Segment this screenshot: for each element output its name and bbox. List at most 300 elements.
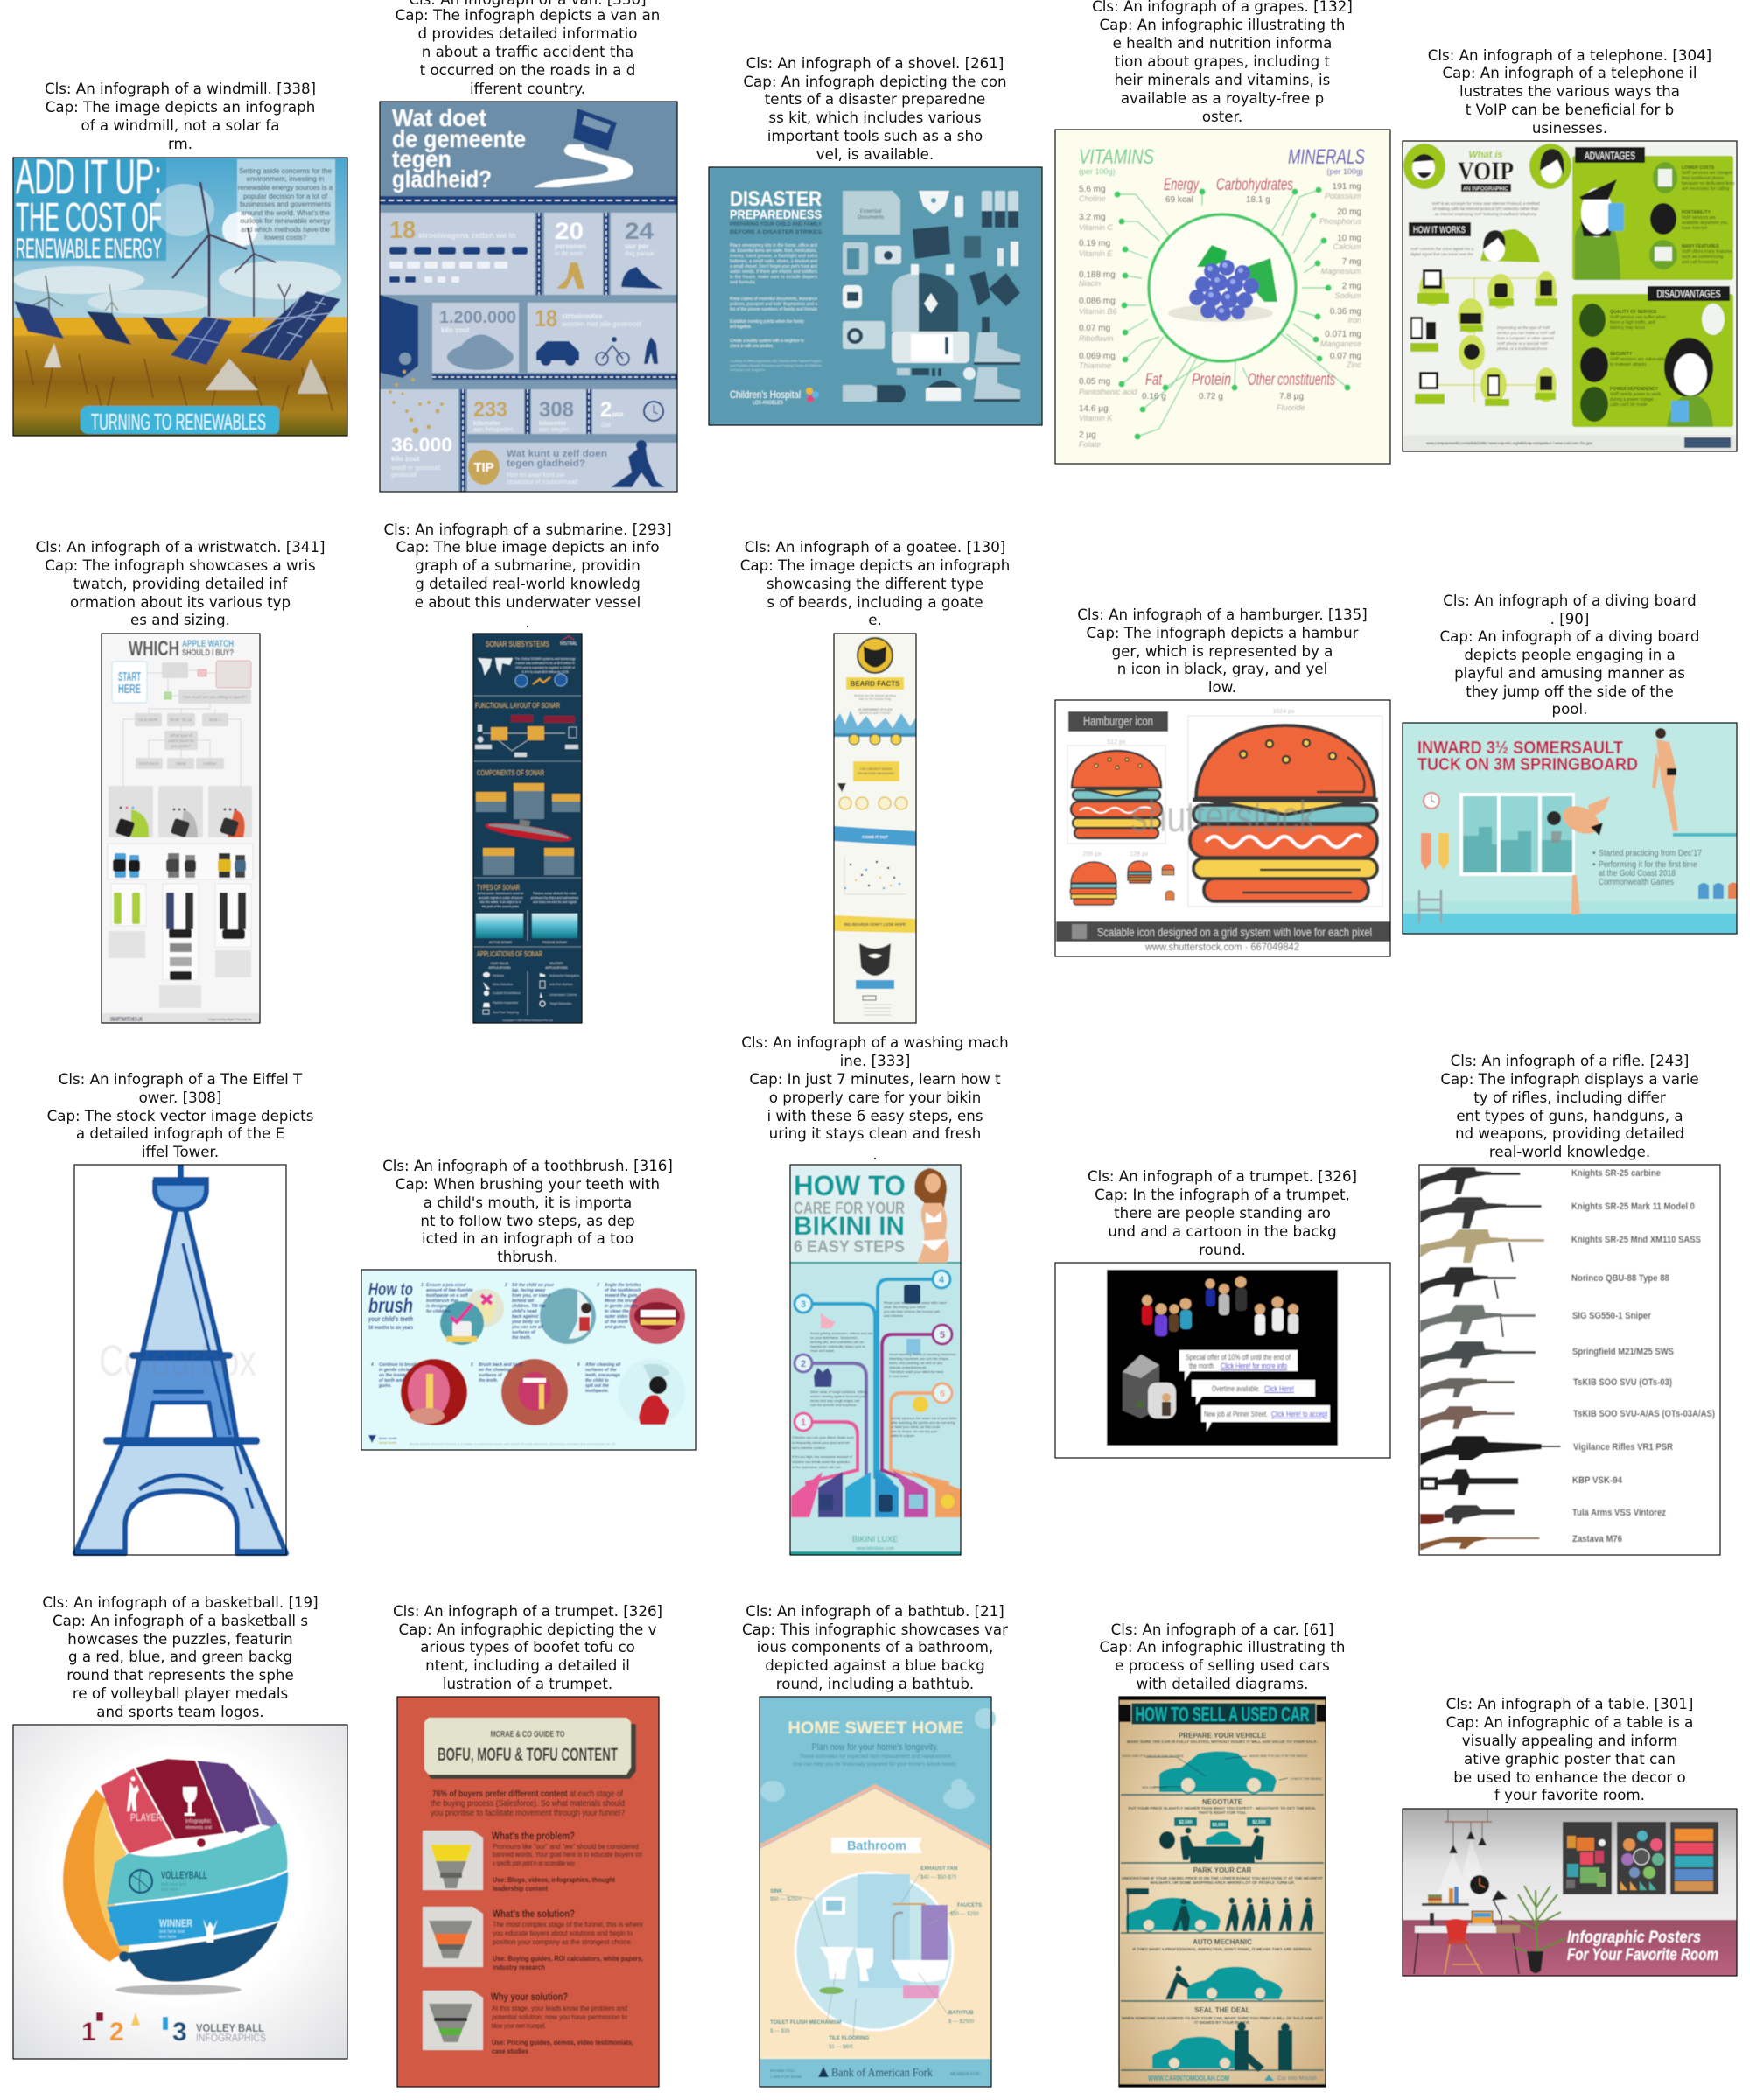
caption: diving board: playful and amusing manner as [1454,665,1685,682]
caption: trumpet (people): there are people standing aro [1114,1205,1331,1222]
image: springboard dive [1403,723,1737,934]
image: gritting poster: 2 [600,398,612,422]
caption: bathtub: ious components of a bathroom, [757,1639,993,1656]
image: bikini care poster: on your swimwear. Sunscreen, [810,1335,858,1340]
image: grape nutrition chart: Iron [1348,316,1362,325]
image: people and speech bubbles: the month. [1189,1362,1215,1371]
caption: grapes: tion about grapes, including t [1115,53,1330,70]
image: gritting poster: tegen [392,145,452,172]
image: disaster preparedness poster: Essential [860,209,881,214]
image: VoIP poster: HOW IT WORKS [1413,225,1466,235]
image: grape nutrition chart: 2 mg [1342,282,1362,291]
panel: windmill [13,80,347,436]
image: grape nutrition chart: Fat [1145,371,1162,389]
image: bikini care poster: Avoid washing bikinis in washing machines. [889,1352,956,1356]
image: how to sell a used car poster: WWW.CARINTOMOOLAH.COM [1148,2075,1229,2082]
caption: toothbrush: a child's mouth, it is importa [424,1194,632,1211]
panel: rifle [1419,1053,1720,1555]
image: bikini care poster: 6 [940,1389,945,1399]
image: sonar poster: Active sonar: transducers send an [478,892,524,895]
image: VoIP poster: VoIP is an acronym for Voice over Internet Protocol, a method [1432,201,1540,206]
image: BOFU MOFU TOFU poster: case studies [492,2047,528,2055]
image: volleyball puzzle: INFOGRAPHICS [196,2032,266,2044]
image: VoIP poster: latency may occur [1610,326,1646,331]
caption: van: Cap: The infograph depicts a van an [396,7,660,24]
image: grape nutrition chart: 0.16 g [1142,392,1166,402]
image: grape nutrition chart: Vitamin E [1079,249,1113,258]
image: VoIP poster: SECURITY [1610,352,1633,357]
image: bikini care poster: wear. By rinsing your bikini [884,1305,925,1309]
image: home sweet home poster: $ — $2500 [948,2020,975,2025]
image: how to brush poster: 18 months to six years [368,1325,413,1331]
panel: bathtub [742,1603,1008,2087]
image: VoIP poster: have Internet [1682,226,1708,231]
image: hamburger icon sizes: Hamburger icon [1083,714,1153,729]
image: sonar poster: COMPONENTS OF SONAR [477,768,544,777]
image: disaster preparedness poster: and Pediatric Disaster Resource and Training Center at Children's [730,363,822,368]
caption: grapes: oster. [1202,108,1242,125]
image: sonar poster: Sea Floor Mapping [493,1011,519,1014]
caption: submarine: . [525,614,530,631]
image: grape nutrition chart: 5.6 mg [1079,185,1106,194]
image: VoIP poster: AN INFOGRAPHIC [1463,187,1509,192]
caption: rifle: Cap: The infograph displays a varie [1440,1071,1699,1088]
image: grape nutrition chart: Energy [1164,176,1200,194]
image: home sweet home poster: 1-800-FOR-BANK [770,2075,802,2079]
image: volleyball puzzle: VOLLEYBALL [161,1869,207,1881]
image: bikini care poster: Rinse your bikini in cold water after each [884,1300,947,1305]
image: how to brush poster: and gums. [605,1325,626,1330]
caption: shovel: important tools such as a sho [767,128,983,144]
caption: trumpet (people) [1088,1168,1357,1258]
image: how to brush poster: gums. [378,1383,392,1389]
image: VoIP poster [1403,141,1737,452]
image: grape nutrition chart: Phosphorus [1320,217,1362,226]
image: beard facts poster: COMB IT OUT [862,835,888,839]
image: grape nutrition chart: 20 mg [1337,207,1362,217]
image: grape nutrition chart: 0.05 mg [1079,377,1110,387]
image: grape nutrition chart: 18.1 g [1246,195,1270,205]
image: renewable energy poster: ADD IT UP: [16,149,162,204]
image: grape nutrition chart: 0.72 g [1199,392,1223,402]
image: how to sell a used car poster: HOW TO SELL A USED CAR [1136,1703,1310,1726]
image: home sweet home poster: $50 — $250+ [770,1897,802,1902]
image: rifle list: Knights SR-25 carbine [1572,1168,1661,1179]
image: how to brush poster: amount of low fluoride [426,1288,473,1293]
image: grape nutrition chart: 0.086 mg [1079,297,1116,306]
image: grape nutrition chart: 7 mg [1342,257,1362,267]
image: how to brush poster: the teeth. [512,1335,531,1340]
image: VoIP poster: phone, or a traditional phone [1497,346,1548,351]
caption: diving board: Cap: An infograph of a diving board [1440,628,1699,645]
caption: wristwatch: es and sizing. [130,612,230,628]
image: BOFU MOFU TOFU poster: BOFU, MOFU & TOFU CONTENT [438,1745,618,1765]
caption: telephone: Cls: An infograph of a telephone. [304] [1428,47,1712,64]
image: how to brush poster: from you, or stand [512,1293,551,1298]
image: how to brush poster: for children. [426,1309,452,1314]
image: disaster preparedness poster: Documents [858,215,884,220]
image: how to sell a used car poster: AUTO MECHANIC [1193,1938,1252,1946]
image: bikini care poster: delicate embellishments [889,1365,927,1369]
image: sonar poster: Anti-Sub Warfare [550,983,573,986]
image: disaster preparedness poster: water needs. If there are infants and toddlers [730,270,817,275]
image: VoIP poster: VoIP services are cheaper [1682,171,1733,176]
image: how to sell a used car poster: Car Into Moolah [1278,2076,1317,2082]
image: disaster preparedness poster: Establish meeting points when the family [730,319,805,325]
image: BOFU MOFU TOFU poster: The most complex stage of the funnel, this is where [493,1920,643,1928]
image: VoIP poster: service you can make a VoIP call [1497,331,1555,335]
caption: grapes: Cap: An infographic illustrating th [1099,17,1346,33]
image: VoIP poster: and call forwarding [1682,260,1718,265]
image: grape nutrition chart: Thiamine [1079,361,1111,370]
image: sonar poster: Target Detection [550,1002,572,1005]
caption: goatee: Cap: The image depicts an infograph [740,557,1010,574]
image: VoIP poster: POWER DEPENDENCY [1610,387,1659,392]
caption: toothbrush: icted in an infograph of a too [422,1230,634,1247]
image: bikini care poster: you will help remove the excess salt [884,1309,941,1313]
image: VoIP poster: than traditional phone [1682,176,1724,181]
image: springboard dive: • [1592,848,1596,858]
image: sonar poster: Passive sonar detects the noise [533,892,577,895]
icon: plant [1509,1886,1566,1960]
image: gritting poster: strooiroutes [562,312,603,320]
caption: goatee: s of beards, including a goate [766,594,984,611]
image: grape nutrition chart: 0.19 mg [1079,239,1110,248]
image: how to sell a used car poster [1119,1697,1326,2087]
image: beard facts poster: 20 DIFFERENT STYLES [858,708,892,711]
image: disaster preparedness poster: Create a buddy system with a neighbor to [730,339,804,344]
image: BOFU MOFU TOFU poster: leadership content [493,1884,548,1893]
image: volleyball puzzle: 1 [81,2018,96,2047]
image: BOFU MOFU TOFU poster: Why your solution? [491,1991,568,2003]
image: grape nutrition chart: 191 mg [1333,182,1362,192]
image: disaster preparedness poster: Children's Hospital [730,388,801,401]
caption: submarine: graph of a submarine, providin [415,557,640,574]
image: hamburger icon sizes: 256 px [1082,851,1102,858]
image: VoIP poster: LOWER COSTS [1682,165,1715,171]
image: how to brush poster: Continue to brush [379,1362,416,1368]
image: how to brush poster: 5 [471,1362,473,1368]
image: gritting poster: gladheid? [392,165,492,192]
image: beard facts poster: THE LONGEST BEARD [859,767,892,771]
caption: van: n about a traffic accident tha [422,44,634,60]
image: bikini care poster: www.bikiniluxe.com [856,1546,894,1551]
image: bikini care poster: BIKINI IN [794,1212,905,1241]
caption: car: Cap: An infographic illustrating th [1099,1639,1346,1656]
image: grape nutrition chart: 0.069 mg [1079,352,1116,361]
image: people and speech bubbles: New job at Pinner Street. [1204,1410,1268,1419]
image: gritting poster: Wat doet [392,104,486,131]
image: how to sell a used car poster: WALMART, OR SOME SHOPPING AREA WHERE LOT OF PEOPLE TURN UP. [1150,1880,1295,1885]
caption: Eiffel Tower [47,1071,313,1160]
caption: windmill: Cls: An infograph of a windmill. [338] [45,80,316,97]
image: sonar poster: Copyright © 2016 Mistral Solutions Pvt. Ltd [502,1018,553,1022]
image: sonar poster: HIGH VALUE [491,962,509,965]
image: home sweet home poster: TOILET FLUSH MECHANISM [770,2020,842,2026]
caption: diving board: . [90] [1550,611,1589,627]
panel: Eiffel Tower [47,1071,313,1555]
caption: goatee: Cls: An infograph of a goatee. [130] [745,539,1005,556]
image: gritting poster: kilo zout [391,455,420,463]
image: how to sell a used car poster: MAKE SURE THE CAR IS FULLY VALETED, WITHOUT DOUBT IT WILL ADD VALUE TO YOUR SALE. [1127,1740,1318,1744]
image: sonar poster: APPLICATIONS [488,966,511,970]
image: disaster preparedness poster: policies, passport and kids' fingerprints and a [730,302,817,307]
image: bikini care poster: fabric, and padding, as well as any [889,1361,942,1365]
icon: medium burger [1071,751,1162,838]
icon: standing diver [1652,728,1678,831]
image: springboard dive: at the Gold Coast 2018 [1599,868,1676,878]
caption: hamburger: Cap: The infograph depicts a hambur [1086,625,1359,641]
panel: table [1403,1696,1737,1976]
image: disaster preparedness poster: Place emergency kits in the home, office and [730,243,817,248]
image: how to brush poster: Better Health [379,1437,396,1440]
caption: table: Cls: An infograph of a table. [301] [1446,1696,1693,1712]
image: gritting poster: in de weer [555,251,584,257]
caption: car: e process of selling used cars [1115,1657,1330,1674]
panel: washing machine [741,1034,1009,1555]
caption: basketball: howcases the puzzles, featurin [67,1631,293,1648]
caption: windmill: of a windmill, not a solar fa [81,117,279,134]
image: how to brush poster: on the chewing [479,1368,510,1373]
image: beard facts poster: hair on the human body [859,697,892,701]
image: how to brush poster: 2 [504,1283,508,1288]
image: BOFU MOFU TOFU poster: you prioritise to facilitate movement through your funnel? [430,1809,625,1818]
image: grape nutrition chart: VITAMINS [1079,145,1154,169]
image: grape nutrition chart: Sodium [1334,291,1362,300]
image: grape nutrition chart: Folate [1079,440,1101,449]
image: bikini care poster: Steer clear of rough surfaces. Sitting [810,1390,867,1394]
image: volleyball puzzle: text here text [161,1882,187,1887]
image: grape nutrition chart: 69 kcal [1166,195,1194,205]
caption: submarine [383,522,672,631]
image: hamburger icon sizes: www.shutterstock.com · 667049842 [1144,941,1299,953]
image: beard facts poster: BEARD FACTS [850,680,900,688]
caption: Eiffel Tower: a detailed infograph of the E [76,1125,284,1142]
image: how to brush poster: of teeth and [379,1378,404,1383]
image: sonar poster: PASSIVE SONAR [542,941,568,944]
panel: van [380,0,677,492]
image: hamburger icon sizes: 1024 px [1273,709,1295,715]
image: beard facts poster: ON RECORD MEASURED [858,772,895,775]
image: BOFU MOFU TOFU poster: Pronouns like "our" and "we" should be considered [493,1842,639,1851]
image: springboard dive: • [1592,859,1596,870]
image: gritting poster: wordt er gestrooid [390,466,440,472]
caption: washing machine: Cap: In just 7 minutes, learn how t [749,1071,1001,1088]
image: volleyball puzzle [13,1725,347,2059]
image: gritting poster: de gemeente [392,125,526,152]
image: bikini care poster: If it's too high, the excessive amount of [792,1454,853,1459]
image: sonar poster: Defense [493,974,504,977]
image: springboard dive: Performing it for the first time [1599,859,1698,870]
caption: telephone: lustrates the various ways tha [1460,83,1680,100]
image: disaster preparedness poster [709,167,1042,425]
image: how to brush poster [361,1270,696,1450]
icon: grape bunch [1168,245,1278,322]
image: how to brush poster: Sit the child on your [512,1283,555,1288]
image: sonar poster: X.X% to reach $XX billion by 2025 [522,670,569,674]
image: gritting poster: aan wegen [539,427,569,433]
image: bikini care poster: 5 [940,1330,945,1340]
caption: grapes: heir minerals and vitamins, is [1115,72,1330,88]
image: bikini care poster: HOW TO [794,1170,906,1201]
image: home sweet home poster: MEMBER FDIC [950,2072,981,2077]
image: disaster preparedness poster: car. Essential items are water, food, medications, [730,248,817,254]
caption: washing machine: ine. [333] [840,1053,910,1069]
image: bikini care poster: CARE FOR YOUR [794,1200,905,1218]
image: disaster preparedness poster: BEFORE A DISASTER STRIKES [730,230,822,235]
image: VoIP poster: VOIP [1458,157,1514,186]
image: apple watch flowchart: START [118,669,141,684]
image: VoIP poster: VoIP converts the voice signal into a [1410,247,1474,251]
image: grape nutrition chart: (per 100g) [1079,167,1116,176]
caption: Eiffel Tower: iffel Tower. [142,1144,219,1160]
image: how to brush poster: 6 [578,1362,580,1368]
image: bikini care poster: Chlorine can ruin your Bikini. Make sure [792,1435,854,1439]
panel: basketball [13,1594,347,2059]
caption: basketball: Cap: An infograph of a basketball s [52,1613,308,1629]
image: renewable energy poster: renewable energy sources is a [238,184,333,192]
image: gritting poster: 18 [389,216,416,243]
image: VoIP poster: DISADVANTAGES [1657,288,1720,300]
image: grape nutrition chart: (per 100g) [1326,167,1363,176]
image: how to brush poster: Angle the bristles [604,1283,641,1288]
icon: player and trophy [127,1776,197,1816]
image: bikini care poster: 1 [801,1418,806,1428]
image: grape nutrition chart: MINERALS [1288,145,1365,169]
image: sonar poster: and does not emit its own signal [533,900,577,904]
image: how to sell a used car poster: SEE OUR LOGO [1142,1786,1167,1789]
image: apple watch flowchart: SHOULD I BUY? [182,648,234,658]
caption: shovel: Cls: An infograph of a shovel. [261] [746,55,1004,72]
caption: van: ifferent country. [470,80,585,97]
image: bikini care poster: bikini in a dryer [891,1433,915,1438]
image: hamburger icon sizes: 128 px [1130,851,1149,858]
caption: table [1446,1696,1693,1803]
image: apple watch flowchart: WHICH [129,637,179,661]
image: Eiffel Tower icon [74,1165,286,1555]
image: how to sell a used car poster: IT SIGNED BY YOUR BUYER. [1194,2020,1250,2025]
image: grape nutrition chart: Carbohydrates [1216,176,1293,194]
image: gritting poster: 20 [555,218,584,244]
image: renewable energy poster: businesses and governments [240,200,331,208]
caption: goatee [740,539,1010,628]
image: BOFU MOFU TOFU poster: 76% of buyers prefer different content at each stage of [432,1789,623,1799]
image: gritting poster: 1.200.000 [439,309,516,327]
image: apple watch flowchart: $449 - $1.1k [170,718,192,722]
image: rifle list: Knights SR-25 Mnd XM110 SASS [1572,1235,1701,1245]
image: disaster preparedness poster: money, hand grease, a flashlight and extra [730,254,817,259]
image: home sweet home poster: $50 — $250 [950,1912,979,1917]
image: grape nutrition chart: Magnesium [1320,267,1362,276]
image: VoIP poster: calls can't be made [1610,402,1648,408]
image: BOFU MOFU TOFU poster: banned words. Your goal here is to educate buyers on [493,1850,642,1858]
image: sonar poster: Coastal Surveillance [493,991,521,995]
caption: basketball: round that represents the sphe [66,1667,294,1684]
caption: wristwatch [35,539,326,628]
image: hamburger icon sizes: 512 px [1107,739,1126,746]
image: how to brush poster: the child to [585,1378,609,1383]
caption: washing machine: Cls: An infograph of a washing mach [741,1034,1009,1051]
caption: trumpet (funnel): Cap: An infographic depicting the v [399,1621,657,1638]
image: how to sell a used car poster: WASH AND POLISH IT IN THE OUTSIDE [1122,1754,1184,1758]
image: sonar poster: the path of the sound pulse [482,905,519,908]
image: BOFU MOFU TOFU poster: position your company as the strongest choice. [493,1937,633,1946]
caption: toothbrush: Cls: An infograph of a toothbrush. [316] [382,1158,673,1174]
image: bikini care poster: and chlorine. [884,1313,904,1318]
image: how to brush poster: Dental Health Services Victoria is a leader in promoting better oral health through advocacy, community outreach and partnerships for all [410,1442,615,1446]
image: rifle list: TsKIB SOO SVU (OTs-03) [1573,1377,1672,1388]
image: how to brush poster: you can see all [511,1325,543,1330]
caption: trumpet (people): Cap: In the infograph of a trumpet, [1095,1186,1350,1203]
image: grape nutrition chart: Potassium [1325,192,1362,200]
image: gritting poster: 36.000 [391,434,452,456]
image: how to brush poster: is designed [426,1304,451,1309]
caption: rifle: ty of rifles, including differ [1474,1089,1666,1106]
caption: goatee: showcasing the different type [766,576,984,592]
panel: trumpet (funnel) [393,1603,662,2087]
caption: wristwatch: Cls: An infograph of a wristwatch. [341] [35,539,326,556]
image: grape nutrition chart: 0.07 mg [1079,324,1110,333]
caption: rifle: Cls: An infograph of a rifle. [243] [1451,1053,1689,1069]
image: rifle list: Tula Arms VSS Vintorez [1572,1508,1666,1518]
image: how to sell a used car poster: UNDERSTAND IF YOUR ASKING PRICE IS ON THE LOWER RANGE YOU MAY PARK IT AT THE NEAREST [1122,1876,1323,1880]
caption: submarine: Cap: The blue image depicts an info [396,539,660,556]
image: how to brush poster: toothbrush that [426,1298,458,1304]
image: rifle list: Norinco QBU-88 Type 88 [1572,1273,1670,1284]
caption: windmill: Cap: The image depicts an infograph [46,99,315,116]
image: bikini care poster: Washing machines can ruin the shape, [889,1356,949,1361]
image: gritting poster: dag paraat [625,251,654,257]
image: bikini care poster: chlorine can break down the spandex [792,1460,850,1464]
image: bikini care poster: in cool water [889,1374,909,1378]
image: gritting poster [380,102,677,492]
image: grape nutrition chart: Calcium [1333,242,1362,251]
image: VoIP poster: such as conferencing [1682,255,1723,260]
image: volleyball puzzle: WINNER [159,1917,192,1929]
image: volleyball puzzle: text here [161,1887,178,1893]
image: how to sell a used car poster: $2,000 [1212,1823,1226,1828]
image: sonar poster: 2015 and is expected to register a CAGR of [515,666,575,669]
caption: Eiffel Tower: Cls: An infograph of a The Eiffel T [59,1071,303,1088]
image: home sweet home poster: FAUCETS [957,1903,982,1908]
image: grape nutrition chart: 2 µg [1079,430,1096,440]
image: bikini care poster: 3 [801,1299,806,1310]
panel: car [1099,1621,1346,2087]
panel: telephone [1403,47,1737,452]
image: grape nutrition chart: 0.188 mg [1079,270,1116,280]
icon: tucked diver [1547,796,1610,843]
image: how to brush poster: surfaces of [512,1330,536,1335]
caption: bathtub: Cls: An infograph of a bathtub. [21] [746,1603,1004,1620]
image: how to brush poster: teeth, encourage [585,1373,620,1378]
image: how to brush poster: outer sides [605,1314,628,1320]
image: bikini care poster: decks and any rough edges can [810,1398,860,1403]
image: how to brush poster: toothpaste. [585,1389,609,1394]
caption: hamburger: ger, which is represented by a [1112,643,1333,660]
caption: hamburger: n icon in black, gray, and yel [1117,661,1327,677]
image: BOFU MOFU TOFU poster: potential solution; now you have permission to [492,2012,627,2021]
image: disaster preparedness poster: a small shovel. Don't forget your pet's food and [730,264,817,270]
image: how to brush poster: the teeth. [479,1378,498,1383]
image: VoIP poster: digital signal that can travel over the [1410,252,1474,256]
image: grape nutrition chart: Riboflavin [1079,334,1114,343]
image: VoIP poster: because no dedicated lines [1682,181,1735,186]
image: how to brush poster: Brush back and forth [479,1362,522,1368]
image: gritting poster: personen [555,242,586,250]
image: sonar poster: Pipeline Inspection [493,1001,518,1004]
caption: wristwatch: ormation about its various typ [70,594,290,611]
caption: trumpet (funnel): ntent, including a detailed il [425,1657,630,1674]
